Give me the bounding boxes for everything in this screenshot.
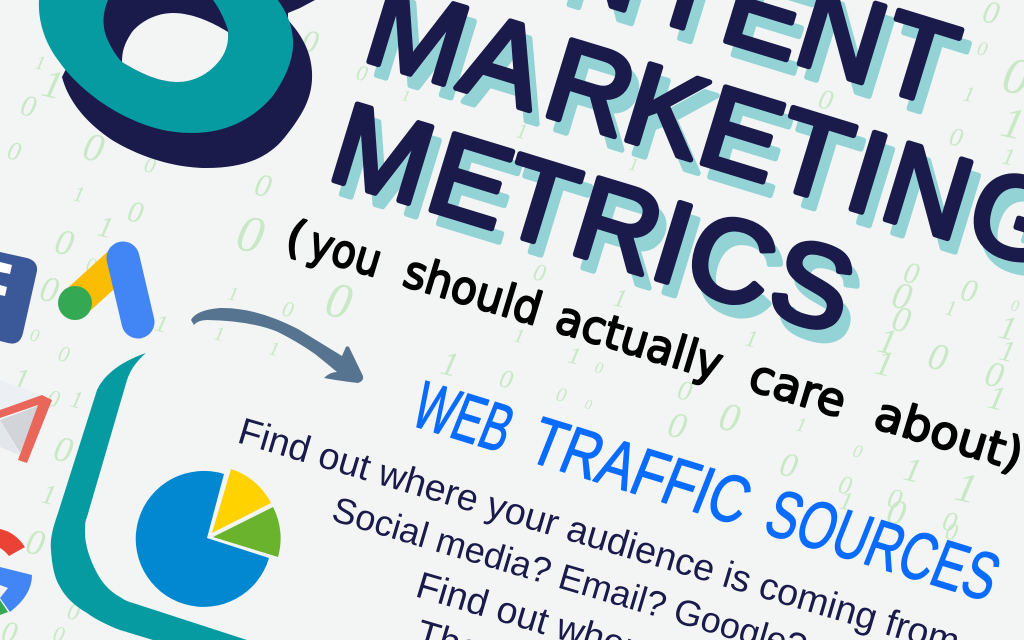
background binary digits: 0 bbox=[251, 166, 275, 204]
background binary digits: 1 bbox=[900, 451, 925, 491]
background binary digits: 0 bbox=[888, 298, 915, 341]
background binary digits: 0 bbox=[939, 506, 960, 539]
heading: web traffic sources: TRAFFIC bbox=[520, 403, 762, 539]
background binary digits: 1 bbox=[794, 413, 809, 437]
heading: web traffic sources: SOURCES bbox=[756, 475, 1011, 615]
background binary digits: 0 bbox=[142, 152, 158, 178]
background binary digits: 1 bbox=[10, 362, 32, 397]
background binary digits: 0 bbox=[45, 386, 62, 414]
background binary digits: 0 bbox=[298, 22, 322, 60]
background binary digits: 0 bbox=[50, 428, 77, 471]
title shadow: METRICS bbox=[325, 91, 876, 372]
background binary digits: 0 bbox=[884, 483, 905, 516]
pie chart bbox=[136, 469, 281, 607]
background binary digits: 0 bbox=[900, 256, 922, 291]
background binary digits: 1 bbox=[226, 282, 241, 306]
background binary digits: 1 bbox=[984, 379, 1009, 419]
background binary digits: 1 bbox=[166, 48, 196, 96]
background binary digits: 1 bbox=[837, 486, 856, 517]
background binary digits: 0 bbox=[280, 296, 296, 322]
background binary digits: 1 bbox=[627, 153, 640, 175]
background binary digits: 1 bbox=[995, 309, 1020, 349]
subtitle bbox=[280, 210, 1024, 482]
heading: web traffic sources bbox=[403, 367, 1011, 615]
background binary digits: 0 bbox=[851, 440, 864, 462]
background binary digits: 0 bbox=[924, 335, 952, 380]
background binary digits: 1 bbox=[951, 464, 982, 513]
icon: gmail envelope bbox=[0, 380, 52, 463]
subtitle: actually bbox=[550, 291, 729, 392]
subtitle: you bbox=[303, 217, 388, 289]
big teal numeral 8 bbox=[39, 0, 315, 168]
background binary digits: 0 bbox=[715, 393, 745, 441]
arrow bbox=[191, 308, 363, 383]
heading: web traffic sources: WEB bbox=[403, 367, 525, 466]
background binary digits: 0 bbox=[943, 519, 960, 547]
background binary digits: 0 bbox=[5, 136, 24, 167]
background binary digits: 0 bbox=[947, 122, 966, 153]
background binary digits: 0 bbox=[593, 359, 605, 378]
background binary digits: 1 bbox=[400, 87, 412, 106]
background binary digits: 0 bbox=[231, 204, 269, 266]
background binary digits: 0 bbox=[957, 271, 981, 309]
background binary digits: 1 bbox=[68, 387, 85, 415]
background binary digits: 1 bbox=[871, 342, 898, 385]
background binary digits: 1 bbox=[38, 479, 59, 512]
background binary digits: 1 bbox=[71, 181, 87, 207]
background binary digits: 0 bbox=[883, 491, 910, 534]
background binary digits: 0 bbox=[28, 324, 41, 346]
subtitle: about) bbox=[868, 387, 1024, 482]
background binary digits: 0 bbox=[664, 404, 691, 447]
background binary digits: 0 bbox=[888, 274, 916, 319]
background binary digits: 0 bbox=[531, 260, 548, 288]
background binary digits: 1 bbox=[566, 343, 583, 371]
background binary digits: 1 bbox=[514, 118, 530, 144]
background binary digits: 0 bbox=[184, 12, 201, 40]
icon: google g bbox=[0, 529, 32, 615]
background binary digits: 1 bbox=[743, 326, 760, 354]
background binary digits: 1 bbox=[33, 51, 48, 75]
background binary digits: 0 bbox=[36, 268, 63, 311]
background binary digits: 0 bbox=[84, 253, 99, 277]
background binary digits: 1 bbox=[874, 320, 901, 363]
subtitle: ( bbox=[280, 210, 312, 266]
background binary digits: 0 bbox=[51, 221, 78, 264]
background binary digits: 0 bbox=[17, 89, 39, 124]
title: METRICS bbox=[318, 77, 869, 358]
icon: google ads bbox=[58, 258, 138, 322]
background binary digits: 0 bbox=[815, 84, 836, 117]
background binary digits: 1 bbox=[437, 345, 462, 385]
background binary digits: 1 bbox=[38, 60, 68, 108]
background binary digits: 1 bbox=[1000, 144, 1017, 172]
background binary digits: 0 bbox=[981, 353, 1008, 396]
background binary digits: 0 bbox=[354, 60, 370, 86]
background binary digits: 0 bbox=[22, 521, 49, 564]
background binary digits: 0 bbox=[124, 195, 146, 230]
background binary digits: 1 bbox=[94, 210, 116, 245]
background binary digits: 0 bbox=[674, 375, 695, 408]
background binary digits: 1 bbox=[611, 283, 630, 314]
background binary digits: 1 bbox=[267, 337, 282, 361]
background binary digits: 0 bbox=[497, 364, 516, 395]
background binary digits: 0 bbox=[583, 397, 593, 413]
panel: teal corner bracket bbox=[51, 353, 247, 640]
background binary digits: 0 bbox=[56, 341, 72, 367]
background binary digits: 0 bbox=[65, 599, 82, 627]
background binary digits: 1 bbox=[943, 295, 959, 321]
icon: facebook bbox=[0, 252, 37, 344]
background binary digits: 1 bbox=[212, 322, 227, 346]
background binary digits: 0 bbox=[836, 470, 855, 501]
background binary digits: 1 bbox=[153, 311, 170, 339]
subtitle: should bbox=[397, 245, 548, 337]
background binary digits: 0 bbox=[321, 270, 357, 330]
background binary digits: 0 bbox=[554, 383, 569, 407]
background binary digits: 0 bbox=[1009, 297, 1021, 316]
background binary digits: 0 bbox=[975, 37, 990, 61]
background binary digits: 0 bbox=[79, 123, 109, 171]
background binary digits: 1 bbox=[996, 334, 1018, 369]
subtitle: care bbox=[743, 350, 852, 429]
background binary digits: 1 bbox=[961, 81, 977, 107]
background binary digits: 0 bbox=[776, 446, 801, 486]
background binary digits: 1 bbox=[512, 324, 527, 348]
